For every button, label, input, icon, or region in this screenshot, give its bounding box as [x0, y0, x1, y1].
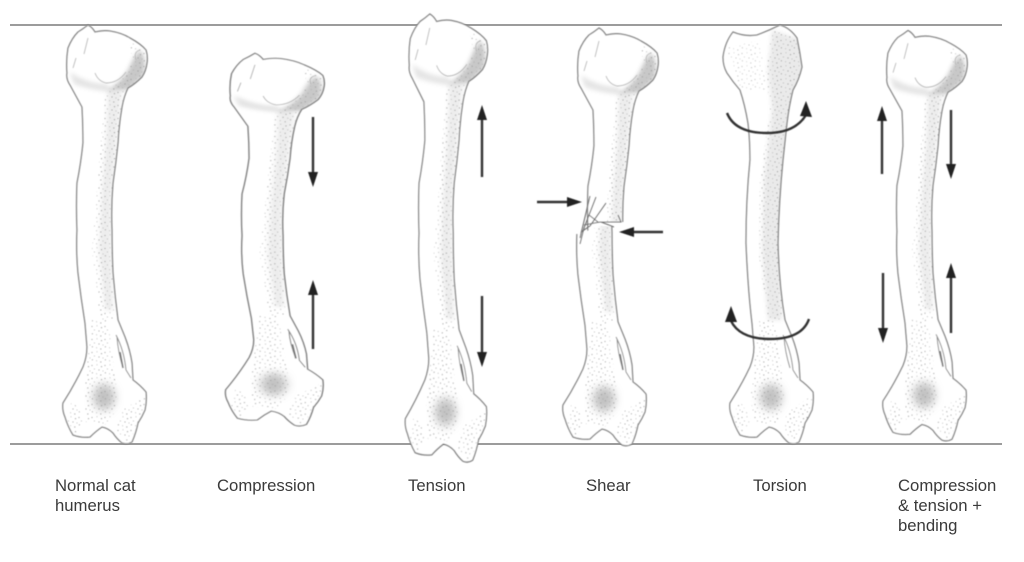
arrows: compression, tension and bending: [877, 106, 956, 343]
bone: torsion: [723, 25, 813, 444]
label: torsion: Torsion: [753, 476, 807, 495]
bone: compression: [225, 53, 324, 426]
label: compression: Compression: [217, 476, 315, 495]
reference line: bottom: [10, 443, 1002, 445]
label: normal cat humerus: humerus: [55, 496, 120, 515]
arrows: torsion: [725, 101, 812, 339]
label: compression and tension plus bending: & tension +: [898, 496, 982, 515]
label: shear: Shear: [586, 476, 631, 495]
label: compression and tension plus bending: Compression: [898, 476, 996, 495]
bone: normal cat humerus: [63, 25, 147, 444]
arrows: tension: [477, 105, 487, 367]
label: tension: Tension: [408, 476, 466, 495]
bone: compression and tension plus bending: [883, 30, 967, 441]
label: compression and tension plus bending: bending: [898, 516, 957, 535]
arrows: compression: [308, 117, 318, 349]
bone: shear with fracture: [563, 27, 658, 447]
label: normal cat humerus: Normal cat: [55, 476, 136, 495]
reference line: top: [10, 24, 1002, 26]
bone: tension: [405, 14, 488, 462]
arrows: shear: [537, 197, 663, 237]
